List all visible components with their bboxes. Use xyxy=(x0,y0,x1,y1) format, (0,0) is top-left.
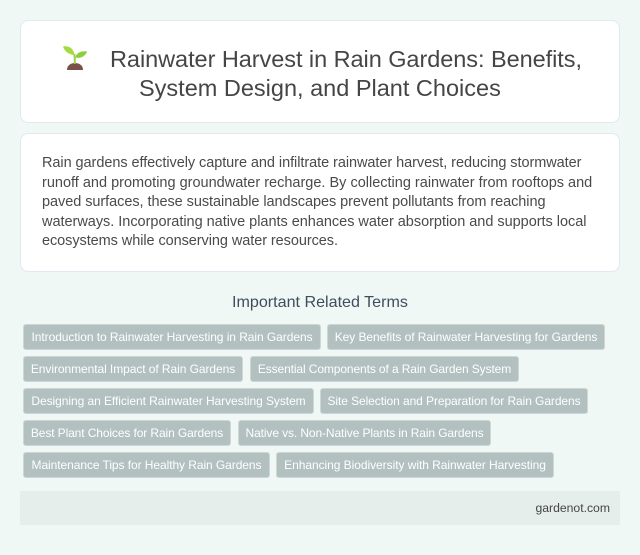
text line 3: paved surfaces, these sustainable landscapes prevent pollutants from reaching xyxy=(42,194,546,210)
footer bar xyxy=(20,491,620,525)
heading xyxy=(110,46,582,101)
tag: Designing an Efficient Rainwater Harvesting System xyxy=(31,394,306,408)
tag xyxy=(327,324,605,350)
tag: Introduction to Rainwater Harvesting in Rain Gardens xyxy=(31,330,313,344)
text line 5: ecosystems while conserving water resources. xyxy=(42,233,338,249)
section heading: related terms: Important Related Terms xyxy=(232,293,408,311)
tag: Native vs. Non-Native Plants in Rain Gardens xyxy=(246,426,483,440)
tag xyxy=(23,356,243,382)
tag: Essential Components of a Rain Garden System xyxy=(258,362,511,376)
heading: System Design, and Plant Choices xyxy=(139,75,501,101)
text line 4: waterways. Incorporating native plants enhances water absorption and supports local xyxy=(42,214,586,230)
tag: Site Selection and Preparation for Rain Gardens xyxy=(327,394,581,408)
tag xyxy=(23,388,314,414)
heading: Rainwater Harvest in Rain Gardens: Benefits, xyxy=(110,46,582,72)
icon: seedling xyxy=(63,46,87,70)
panel: title card xyxy=(20,20,620,123)
tag: Environmental Impact of Rain Gardens xyxy=(31,362,235,376)
tag xyxy=(23,324,321,350)
tag xyxy=(250,356,519,382)
tag: Best Plant Choices for Rain Gardens xyxy=(31,426,223,440)
tag: Maintenance Tips for Healthy Rain Gardens xyxy=(32,458,261,472)
tag xyxy=(276,452,554,478)
text line 1: Rain gardens effectively capture and infiltrate rainwater harvest, reducing stormwater xyxy=(42,155,581,171)
footer bar: gardenot.com xyxy=(535,501,610,515)
tag xyxy=(23,420,231,446)
tag xyxy=(238,420,491,446)
tag: Key Benefits of Rainwater Harvesting for Gardens xyxy=(335,330,597,344)
tag: Enhancing Biodiversity with Rainwater Harvesting xyxy=(284,458,546,472)
tag list xyxy=(23,324,605,478)
text line 2: runoff and promoting groundwater recharge. By collecting rainwater from rooftops and xyxy=(42,175,592,191)
tag xyxy=(320,388,588,414)
tag xyxy=(23,452,270,478)
panel: summary text xyxy=(20,133,620,272)
